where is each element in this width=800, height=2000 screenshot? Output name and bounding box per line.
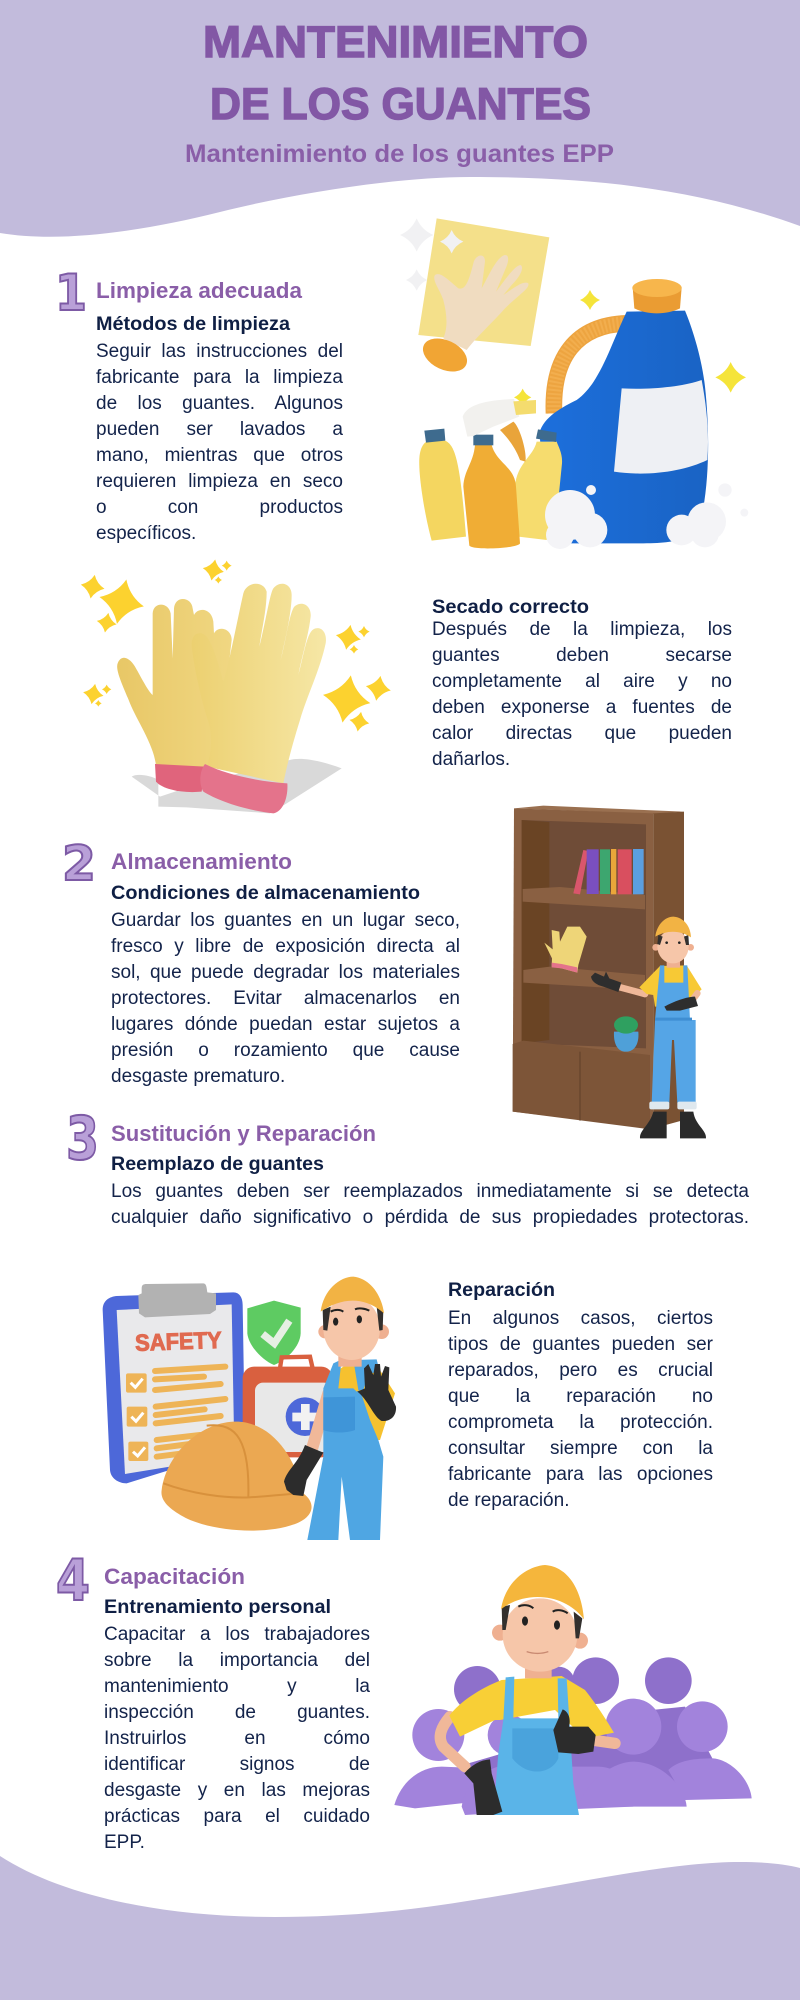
white sparkles	[400, 218, 463, 291]
cloth	[418, 218, 549, 346]
overalls	[307, 1359, 383, 1540]
shirt	[328, 1360, 395, 1440]
number 3: 3	[66, 1104, 99, 1174]
arm	[312, 1393, 328, 1450]
checklist	[126, 1373, 148, 1461]
spray bottle	[463, 445, 520, 548]
text: reparacion: de reparación.	[448, 1490, 569, 1511]
shirt	[639, 965, 702, 1007]
cabinet	[513, 1041, 650, 1129]
text: reparacion: tipos de guantes pueden ser	[448, 1334, 713, 1355]
illustration: safety checklist and worker	[103, 1277, 396, 1540]
text: metodos de limpieza: de los guantes. Algunos	[96, 393, 343, 414]
text: metodos de limpieza: mano, mientras que otros	[96, 445, 343, 466]
text: condiciones de almacenamiento	[111, 910, 460, 1087]
interior	[522, 820, 646, 1048]
heading: capacitacion: Capacitación	[104, 1564, 245, 1589]
team figures	[454, 1657, 715, 1813]
first aid kit	[280, 1357, 313, 1368]
front cuff	[200, 764, 287, 813]
worker	[440, 1565, 615, 1815]
subheading: secado: Secado correcto	[432, 597, 589, 618]
text: reemplazo de guantes	[111, 1181, 749, 1228]
subtitle: Mantenimiento de los guantes EPP	[185, 140, 614, 168]
illustration: worker and team	[394, 1565, 752, 1815]
text: entrenamiento personal: prácticas para el cuidado	[104, 1806, 370, 1827]
hat	[655, 917, 691, 937]
subheading: reparacion: Reparación	[448, 1280, 555, 1301]
text: condiciones de almacenamiento: presión o rozamiento que cause	[111, 1040, 460, 1061]
shelves	[523, 887, 645, 909]
paper	[117, 1304, 234, 1474]
header wave	[0, 0, 800, 237]
illustration: cleaning products	[400, 218, 748, 549]
hand	[434, 255, 528, 350]
cuff	[418, 332, 472, 378]
text: metodos de limpieza	[96, 341, 343, 544]
text: condiciones de almacenamiento: desgaste prematuro.	[111, 1066, 285, 1087]
head	[652, 944, 659, 951]
overalls	[493, 1677, 579, 1815]
title	[203, 18, 591, 129]
text: entrenamiento personal: sobre la importancia del	[104, 1650, 370, 1671]
illustration: bookcase and worker	[513, 806, 706, 1138]
text: metodos de limpieza: específicos.	[96, 523, 196, 544]
subheading: reemplazo: Reemplazo de guantes	[111, 1154, 324, 1175]
text: entrenamiento personal: identificar signos de	[104, 1754, 370, 1775]
text: condiciones de almacenamiento: protectores. Evitar almacenarlos en	[111, 988, 460, 1009]
books	[573, 850, 588, 894]
text: metodos de limpieza: o con productos	[96, 497, 343, 518]
text: condiciones de almacenamiento: sol, que puede degradar los materiales	[111, 962, 460, 983]
text: secado correcto: completamente al aire y no	[432, 671, 732, 692]
text: metodos de limpieza: requieren limpieza en seco	[96, 471, 343, 492]
text: metodos de limpieza: fabricante para la limpieza	[96, 367, 343, 388]
cuffs	[649, 1102, 669, 1109]
shield	[247, 1301, 301, 1365]
front glove	[192, 584, 326, 783]
thumb-up glove	[553, 1709, 596, 1754]
overalls	[652, 965, 696, 1103]
text: reparacion	[448, 1308, 713, 1511]
yellow sparkles	[514, 290, 746, 406]
lower glove	[284, 1445, 323, 1496]
heading: limpieza adecuada: Limpieza adecuada	[96, 278, 303, 303]
text: reparacion: reparados, pero es crucial	[448, 1360, 713, 1381]
lower glove	[464, 1759, 502, 1815]
heading: sustitucion: Sustitución y Reparación	[111, 1121, 376, 1146]
arms	[440, 1717, 465, 1767]
shadow	[132, 759, 342, 813]
text: entrenamiento personal: Capacitar a los trabajadores	[104, 1624, 370, 1645]
shirt	[449, 1676, 614, 1738]
text: secado correcto: calor directas que pueden	[432, 723, 732, 744]
hose	[554, 323, 627, 413]
text: entrenamiento personal: inspección de guantes.	[104, 1702, 370, 1723]
text: reparacion: que la reparación no	[448, 1386, 713, 1407]
raised glove	[357, 1364, 396, 1421]
arm	[620, 987, 645, 994]
subheading: entrenamiento: Entrenamiento personal	[104, 1597, 331, 1618]
text: metodos de limpieza: Seguir las instrucciones del	[96, 341, 343, 362]
text: reparacion: En algunos casos, ciertos	[448, 1308, 713, 1329]
head	[318, 1325, 332, 1338]
text: secado correcto: deben exponerse a fuentes de	[432, 697, 732, 718]
text: reparacion: fabricante para las opciones	[448, 1464, 713, 1485]
boots	[640, 1112, 667, 1138]
text: condiciones de almacenamiento: Guardar los guantes en un lugar seco,	[111, 910, 460, 931]
illustration: yellow gloves	[79, 558, 393, 813]
hard hat	[161, 1422, 312, 1531]
text: secado correcto	[432, 619, 732, 770]
number 1: 1	[55, 264, 87, 322]
bookcase frame	[514, 806, 684, 814]
text: entrenamiento personal: desgaste y en las mejoras	[104, 1780, 370, 1801]
text: entrenamiento personal: Instruirlos en cómo	[104, 1728, 370, 1749]
text: entrenamiento personal: EPP.	[104, 1832, 145, 1853]
text: condiciones de almacenamiento: fresco y libre de exposición directa al	[111, 936, 460, 957]
text: reemplazo de guantes: Los guantes deben ser reemplazados inmediatamente si se detecta	[111, 1181, 749, 1202]
small gloves	[544, 927, 587, 973]
text: reparacion: comprometa la protección.	[448, 1412, 713, 1433]
back glove	[117, 599, 232, 767]
text: secado correcto: dañarlos.	[432, 749, 510, 770]
number 4: 4	[56, 1548, 90, 1614]
heading: almacenamiento: Almacenamiento	[111, 849, 292, 874]
plant	[614, 1032, 638, 1052]
text: entrenamiento personal	[104, 1624, 370, 1853]
worker	[284, 1277, 396, 1540]
hat	[501, 1565, 584, 1619]
subheading: metodos: Métodos de limpieza	[96, 314, 290, 335]
text: secado correcto: guantes deben secarse	[432, 645, 732, 666]
back cuff	[155, 764, 205, 792]
blue bottle	[539, 311, 708, 543]
text: metodos de limpieza: pueden ser lavados a	[96, 419, 343, 440]
head	[492, 1625, 508, 1641]
label	[614, 380, 708, 474]
text: reparacion: consultar siempre con la	[448, 1438, 713, 1459]
text: condiciones de almacenamiento: lugares dónde puedan estar sujetos a	[111, 1014, 460, 1035]
clipboard	[103, 1292, 245, 1483]
safety label: SAFETY	[135, 1327, 223, 1356]
right bottle	[515, 442, 562, 540]
cap	[633, 287, 682, 313]
left bottle	[419, 441, 466, 541]
glove right	[664, 997, 698, 1011]
footer wave	[0, 1856, 800, 2000]
sparkles	[79, 558, 393, 733]
worker	[591, 917, 706, 1138]
text: entrenamiento personal: mantenimiento y la	[104, 1676, 370, 1697]
subheading: condiciones: Condiciones de almacenamiento	[111, 883, 420, 904]
hat	[321, 1277, 384, 1313]
text: secado correcto: Después de la limpieza, los	[432, 619, 732, 640]
title: DE LOS GUANTES	[210, 80, 591, 129]
number 2: 2	[62, 836, 96, 892]
foam	[545, 483, 748, 549]
clip	[138, 1283, 216, 1317]
text: reemplazo de guantes: cualquier daño significativo o pérdida de sus propiedades protectoras.	[111, 1207, 749, 1228]
title: MANTENIMIENTO	[203, 18, 588, 67]
